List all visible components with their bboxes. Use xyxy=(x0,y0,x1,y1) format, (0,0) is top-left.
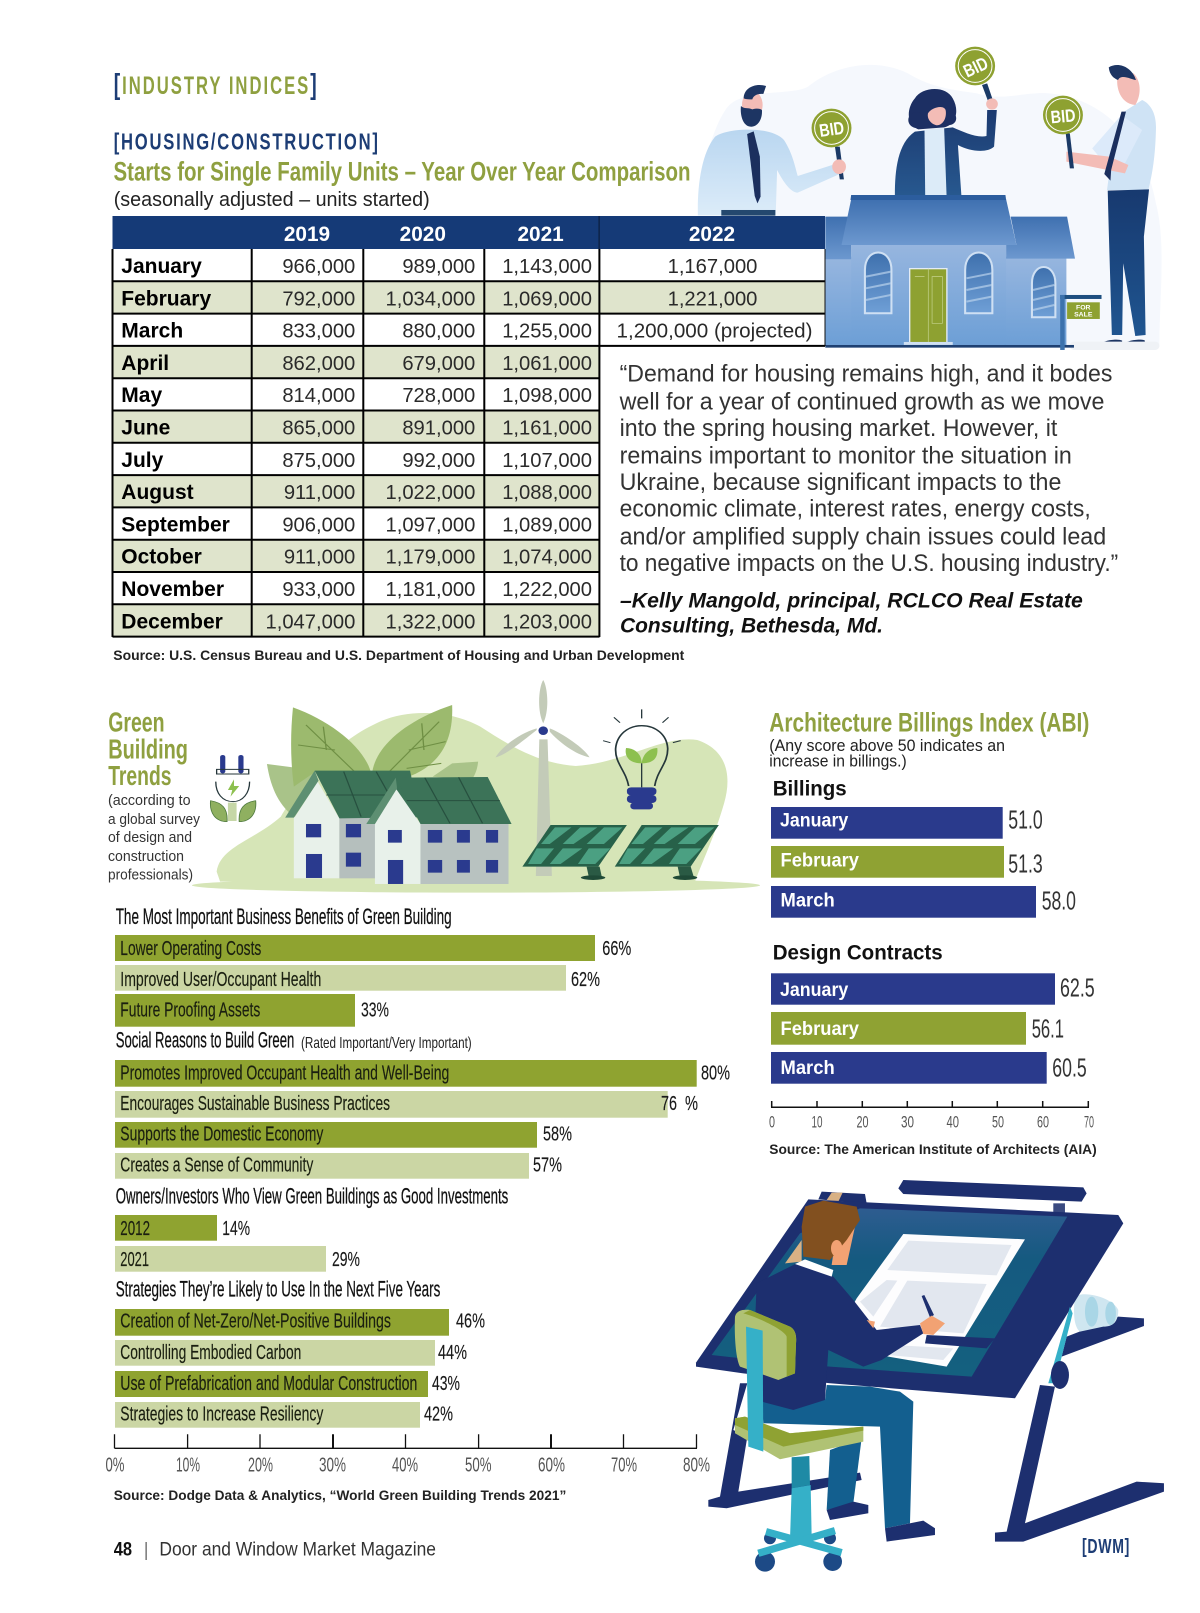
note: survey description: professionals) xyxy=(108,866,193,883)
quote attribution: –Kelly Mangold, principal, RCLCO Real Estate xyxy=(620,588,1083,612)
bar chart: owners and investors: 2012 xyxy=(120,1218,150,1240)
pull quote: well for a year of continued growth as we move xyxy=(619,388,1104,415)
table header: 2022 xyxy=(689,223,735,246)
bar chart: billings xyxy=(771,804,1076,918)
table: housing starts by month: 862,000 xyxy=(282,353,355,375)
axis: percent scale: 60% xyxy=(538,1455,565,1477)
table: housing starts by month: 1,061,000 xyxy=(502,353,592,375)
table: housing starts by month: 1,069,000 xyxy=(502,288,592,310)
bar chart: design contracts: March xyxy=(780,1058,835,1079)
bar chart: billings: January xyxy=(780,811,849,832)
bar chart: business benefits: 62% xyxy=(571,969,600,991)
illustration: bidders around a house for sale xyxy=(698,47,1162,350)
bar chart: social reasons: 58% xyxy=(543,1124,572,1146)
table: housing starts by month: 1,179,000 xyxy=(385,547,475,569)
bar chart: strategies: Controlling Embodied Carbon xyxy=(120,1342,301,1364)
table: housing starts by month: 679,000 xyxy=(402,353,475,375)
bar chart: owners and investors xyxy=(115,1215,360,1272)
chart heading: social reasons: (Rated Important/Very Important) xyxy=(301,1035,472,1052)
note: survey description: construction xyxy=(108,848,184,865)
table header: 2020 xyxy=(400,223,446,246)
bar chart: strategies: 43% xyxy=(432,1373,460,1395)
illustration: bidders around a house for sale: BID xyxy=(960,52,991,81)
note: survey description: of design and xyxy=(108,829,192,846)
table: housing starts by month: 1,200,000 (projected) xyxy=(616,321,812,343)
axis: percent scale: 10% xyxy=(176,1455,200,1477)
table: housing starts by month: 1,322,000 xyxy=(385,611,475,633)
ABI source: Source: The American Institute of Architects (AIA) xyxy=(769,1141,1097,1157)
table: housing starts by month: November xyxy=(121,578,224,601)
illustration: bidders around a house for sale: FOR xyxy=(1076,305,1091,312)
axis: percent scale xyxy=(106,1434,710,1477)
table source: Source: U.S. Census Bureau and U.S. Department of Housing and Urban Development xyxy=(113,647,685,663)
table: housing starts by month xyxy=(112,216,825,637)
bar chart: billings: March xyxy=(780,891,835,912)
table: housing starts by month: February xyxy=(121,287,211,310)
table: housing starts by month: 1,047,000 xyxy=(265,611,355,633)
table: housing starts by month: 1,221,000 xyxy=(668,288,757,310)
page footer: Door and Window Market Magazine xyxy=(159,1540,436,1561)
subheading: billings: Billings xyxy=(773,778,847,801)
pull quote: and/or amplified supply chain issues could lead xyxy=(620,523,1106,550)
pull quote: to negative impacts on the U.S. housing industry.” xyxy=(620,550,1118,577)
table: housing starts by month: 728,000 xyxy=(402,385,475,407)
table: housing starts by month: 875,000 xyxy=(282,450,355,472)
table: housing starts by month: 1,181,000 xyxy=(385,579,475,601)
axis: ABI scale: 0 xyxy=(769,1112,775,1131)
chart heading: owners and investors: Owners/Investors Who View Green Buildings as Good Investments xyxy=(116,1183,508,1208)
bar chart: business benefits: Future Proofing Assets xyxy=(120,1000,260,1022)
table: housing starts by month: 814,000 xyxy=(282,385,355,407)
table: housing starts by month: 880,000 xyxy=(402,321,475,343)
chart heading: social reasons: Social Reasons to Build Green xyxy=(116,1028,294,1053)
table header: 2019 xyxy=(284,223,330,246)
heading: housing/construction: [HOUSING/CONSTRUCTION] xyxy=(114,128,380,154)
bar chart: owners and investors: 2021 xyxy=(120,1249,149,1271)
table: housing starts by month: 989,000 xyxy=(402,256,475,278)
table: housing starts by month: October xyxy=(121,546,202,569)
table: housing starts by month: September xyxy=(121,513,230,536)
table: housing starts by month: 891,000 xyxy=(402,418,475,440)
magazine mark: DWM: [DWM] xyxy=(1082,1536,1130,1558)
table: housing starts by month: 933,000 xyxy=(282,579,355,601)
table: housing starts by month: 911,000 xyxy=(284,482,355,504)
table: housing starts by month: 1,022,000 xyxy=(385,482,475,504)
bar chart: billings: February xyxy=(780,851,859,872)
bar chart: strategies xyxy=(115,1309,485,1428)
table: housing starts by month: January xyxy=(121,255,202,278)
illustration: bidders around a house for sale: SALE xyxy=(1074,312,1093,319)
icon: plug with leaves xyxy=(210,755,256,822)
page footer: 48 xyxy=(114,1540,132,1561)
table: housing starts by month: 1,088,000 xyxy=(502,482,592,504)
section title: industry indices: [INDUSTRY INDICES] xyxy=(114,69,319,101)
heading: green building trends: Green xyxy=(108,707,165,738)
table: housing starts by month: 1,143,000 xyxy=(502,256,592,278)
pull quote xyxy=(619,361,1118,577)
table: housing starts by month: April xyxy=(121,352,169,375)
illustration: bidders around a house for sale: BID xyxy=(1050,105,1076,127)
chart heading: strategies: Strategies They’re Likely to Use In the Next Five Years xyxy=(116,1277,440,1302)
table: housing starts by month: August xyxy=(121,481,194,504)
axis: ABI scale: 20 xyxy=(856,1112,868,1131)
axis: ABI scale: 30 xyxy=(901,1112,914,1131)
bar chart: social reasons: 76 xyxy=(661,1093,677,1115)
table: housing starts by month: 992,000 xyxy=(402,450,475,472)
bar chart: business benefits xyxy=(115,935,631,1027)
table: housing starts by month: June xyxy=(121,416,170,440)
bar chart: business benefits: 33% xyxy=(361,1000,389,1022)
table: housing starts by month: 833,000 xyxy=(282,321,355,343)
bar chart: strategies: 46% xyxy=(456,1311,485,1333)
axis: ABI scale xyxy=(769,1101,1094,1131)
axis: percent scale: 0% xyxy=(106,1455,125,1477)
table: housing starts by month: 1,034,000 xyxy=(385,288,475,310)
bar chart: design contracts: February xyxy=(780,1019,859,1040)
table: housing starts by month: 1,097,000 xyxy=(385,514,475,536)
bar chart: social reasons: Encourages Sustainable Business Practices xyxy=(120,1093,390,1115)
bar chart: strategies: Creation of Net-Zero/Net-Positive Buildings xyxy=(120,1311,391,1333)
pull quote: into the spring housing market. However, it xyxy=(620,415,1058,442)
bar chart: strategies: 44% xyxy=(438,1342,467,1364)
heading: green building trends: Building xyxy=(108,733,188,764)
bar chart: billings: 51.0 xyxy=(1008,804,1043,834)
axis: percent scale: 70% xyxy=(611,1455,637,1477)
pull quote: “Demand for housing remains high, and it bodes xyxy=(620,361,1112,388)
table header xyxy=(112,216,825,249)
note: ABI explanation xyxy=(769,737,1005,771)
table: housing starts by month: March xyxy=(121,320,183,343)
bar chart: strategies: 42% xyxy=(424,1404,453,1426)
axis: ABI scale: 40 xyxy=(946,1112,959,1131)
table: housing starts by month: 1,203,000 xyxy=(502,611,592,633)
table: housing starts by month: 1,161,000 xyxy=(502,418,592,440)
bar chart: business benefits: Improved User/Occupant Health xyxy=(120,969,321,991)
bar chart: strategies: Use of Prefabrication and Modular Construction xyxy=(120,1373,417,1395)
table: housing starts by month: 1,098,000 xyxy=(502,385,592,407)
table: housing starts by month: 1,074,000 xyxy=(502,547,592,569)
table: housing starts by month: 1,107,000 xyxy=(502,450,592,472)
bar chart: design contracts: 56.1 xyxy=(1032,1014,1064,1044)
table: housing starts by month: December xyxy=(121,610,223,633)
bar chart: owners and investors: 29% xyxy=(332,1249,360,1271)
quote attribution xyxy=(620,588,1083,638)
axis: percent scale: 30% xyxy=(319,1455,346,1477)
axis: ABI scale: 50 xyxy=(992,1112,1004,1131)
heading: architecture billings index: Architecture Billings Index (ABI) xyxy=(769,708,1089,738)
bar chart: business benefits: 66% xyxy=(602,938,631,960)
table: housing starts by month: 1,222,000 xyxy=(502,579,592,601)
axis: percent scale: 40% xyxy=(392,1455,418,1477)
table: housing starts by month: July xyxy=(121,449,164,472)
table: housing starts by month: 966,000 xyxy=(282,256,355,278)
table: housing starts by month: 911,000 xyxy=(284,547,355,569)
axis: ABI scale: 10 xyxy=(812,1112,822,1131)
bar chart: design contracts xyxy=(771,973,1095,1084)
axis: percent scale: 50% xyxy=(465,1455,492,1477)
note: ABI explanation: (Any score above 50 indicates an xyxy=(769,737,1005,755)
table: housing starts by month: May xyxy=(121,384,162,407)
bar chart: social reasons xyxy=(115,1060,730,1179)
table: housing starts by month: 906,000 xyxy=(282,514,355,536)
subheading: design contracts: Design Contracts xyxy=(773,941,943,964)
axis: percent scale: 20% xyxy=(248,1455,273,1477)
pull quote: remains important to monitor the situation in xyxy=(620,442,1072,469)
table: housing starts by month: 792,000 xyxy=(282,288,355,310)
subheading: seasonally adjusted: (seasonally adjusted – units started) xyxy=(114,189,430,211)
heading: green building trends: Trends xyxy=(108,760,172,791)
bar chart: owners and investors: 14% xyxy=(222,1218,250,1240)
bar chart: design contracts: January xyxy=(780,980,849,1001)
bar chart: design contracts: 60.5 xyxy=(1052,1053,1087,1083)
pull quote: Ukraine, because significant impacts to the xyxy=(620,469,1061,496)
chart source: Source: Dodge Data & Analytics, “World Green Building Trends 2021” xyxy=(114,1487,566,1503)
bar chart: social reasons: % xyxy=(685,1093,698,1115)
bar chart: social reasons: 57% xyxy=(533,1155,562,1177)
table: housing starts by month: 1,167,000 xyxy=(668,256,757,278)
bar chart: billings: 58.0 xyxy=(1042,885,1076,915)
bar chart: social reasons: Supports the Domestic Economy xyxy=(120,1124,323,1146)
table: housing starts by month: 865,000 xyxy=(282,418,355,440)
bar chart: social reasons: Creates a Sense of Community xyxy=(120,1155,313,1177)
bar chart: design contracts: 62.5 xyxy=(1060,973,1095,1003)
axis: ABI scale: 60 xyxy=(1037,1112,1049,1131)
table header: 2021 xyxy=(517,223,564,246)
heading: green building trends xyxy=(108,707,188,791)
quote attribution: Consulting, Bethesda, Md. xyxy=(620,614,883,638)
bar chart: business benefits: Lower Operating Costs xyxy=(120,938,261,960)
note: ABI explanation: increase in billings.) xyxy=(769,753,907,771)
chart heading: business benefits: The Most Important Business Benefits of Green Building xyxy=(116,904,452,929)
note: survey description xyxy=(108,792,200,883)
axis: percent scale: 80% xyxy=(683,1455,710,1477)
note: survey description: (according to xyxy=(108,792,191,809)
axis: ABI scale: 70 xyxy=(1084,1112,1094,1131)
illustration: green houses, wind turbine, solar panels, bulb xyxy=(192,680,760,893)
note: survey description: a global survey xyxy=(108,811,200,828)
bar chart: social reasons: Promotes Improved Occupant Health and Well-Being xyxy=(120,1062,449,1084)
bar chart: strategies: Strategies to Increase Resiliency xyxy=(120,1404,323,1426)
illustration: architect at drafting table xyxy=(696,1180,1164,1572)
table: housing starts by month: 1,089,000 xyxy=(502,514,592,536)
bar chart: billings: 51.3 xyxy=(1008,849,1043,879)
heading: starts for single family units: Starts for Single Family Units – Year Over Year Comparison xyxy=(114,157,690,187)
table: housing starts by month: 1,255,000 xyxy=(502,321,592,343)
illustration: bidders around a house for sale: BID xyxy=(818,117,845,141)
pull quote: economic climate, interest rates, energy costs, xyxy=(620,496,1091,523)
bar chart: social reasons: 80% xyxy=(701,1062,730,1084)
